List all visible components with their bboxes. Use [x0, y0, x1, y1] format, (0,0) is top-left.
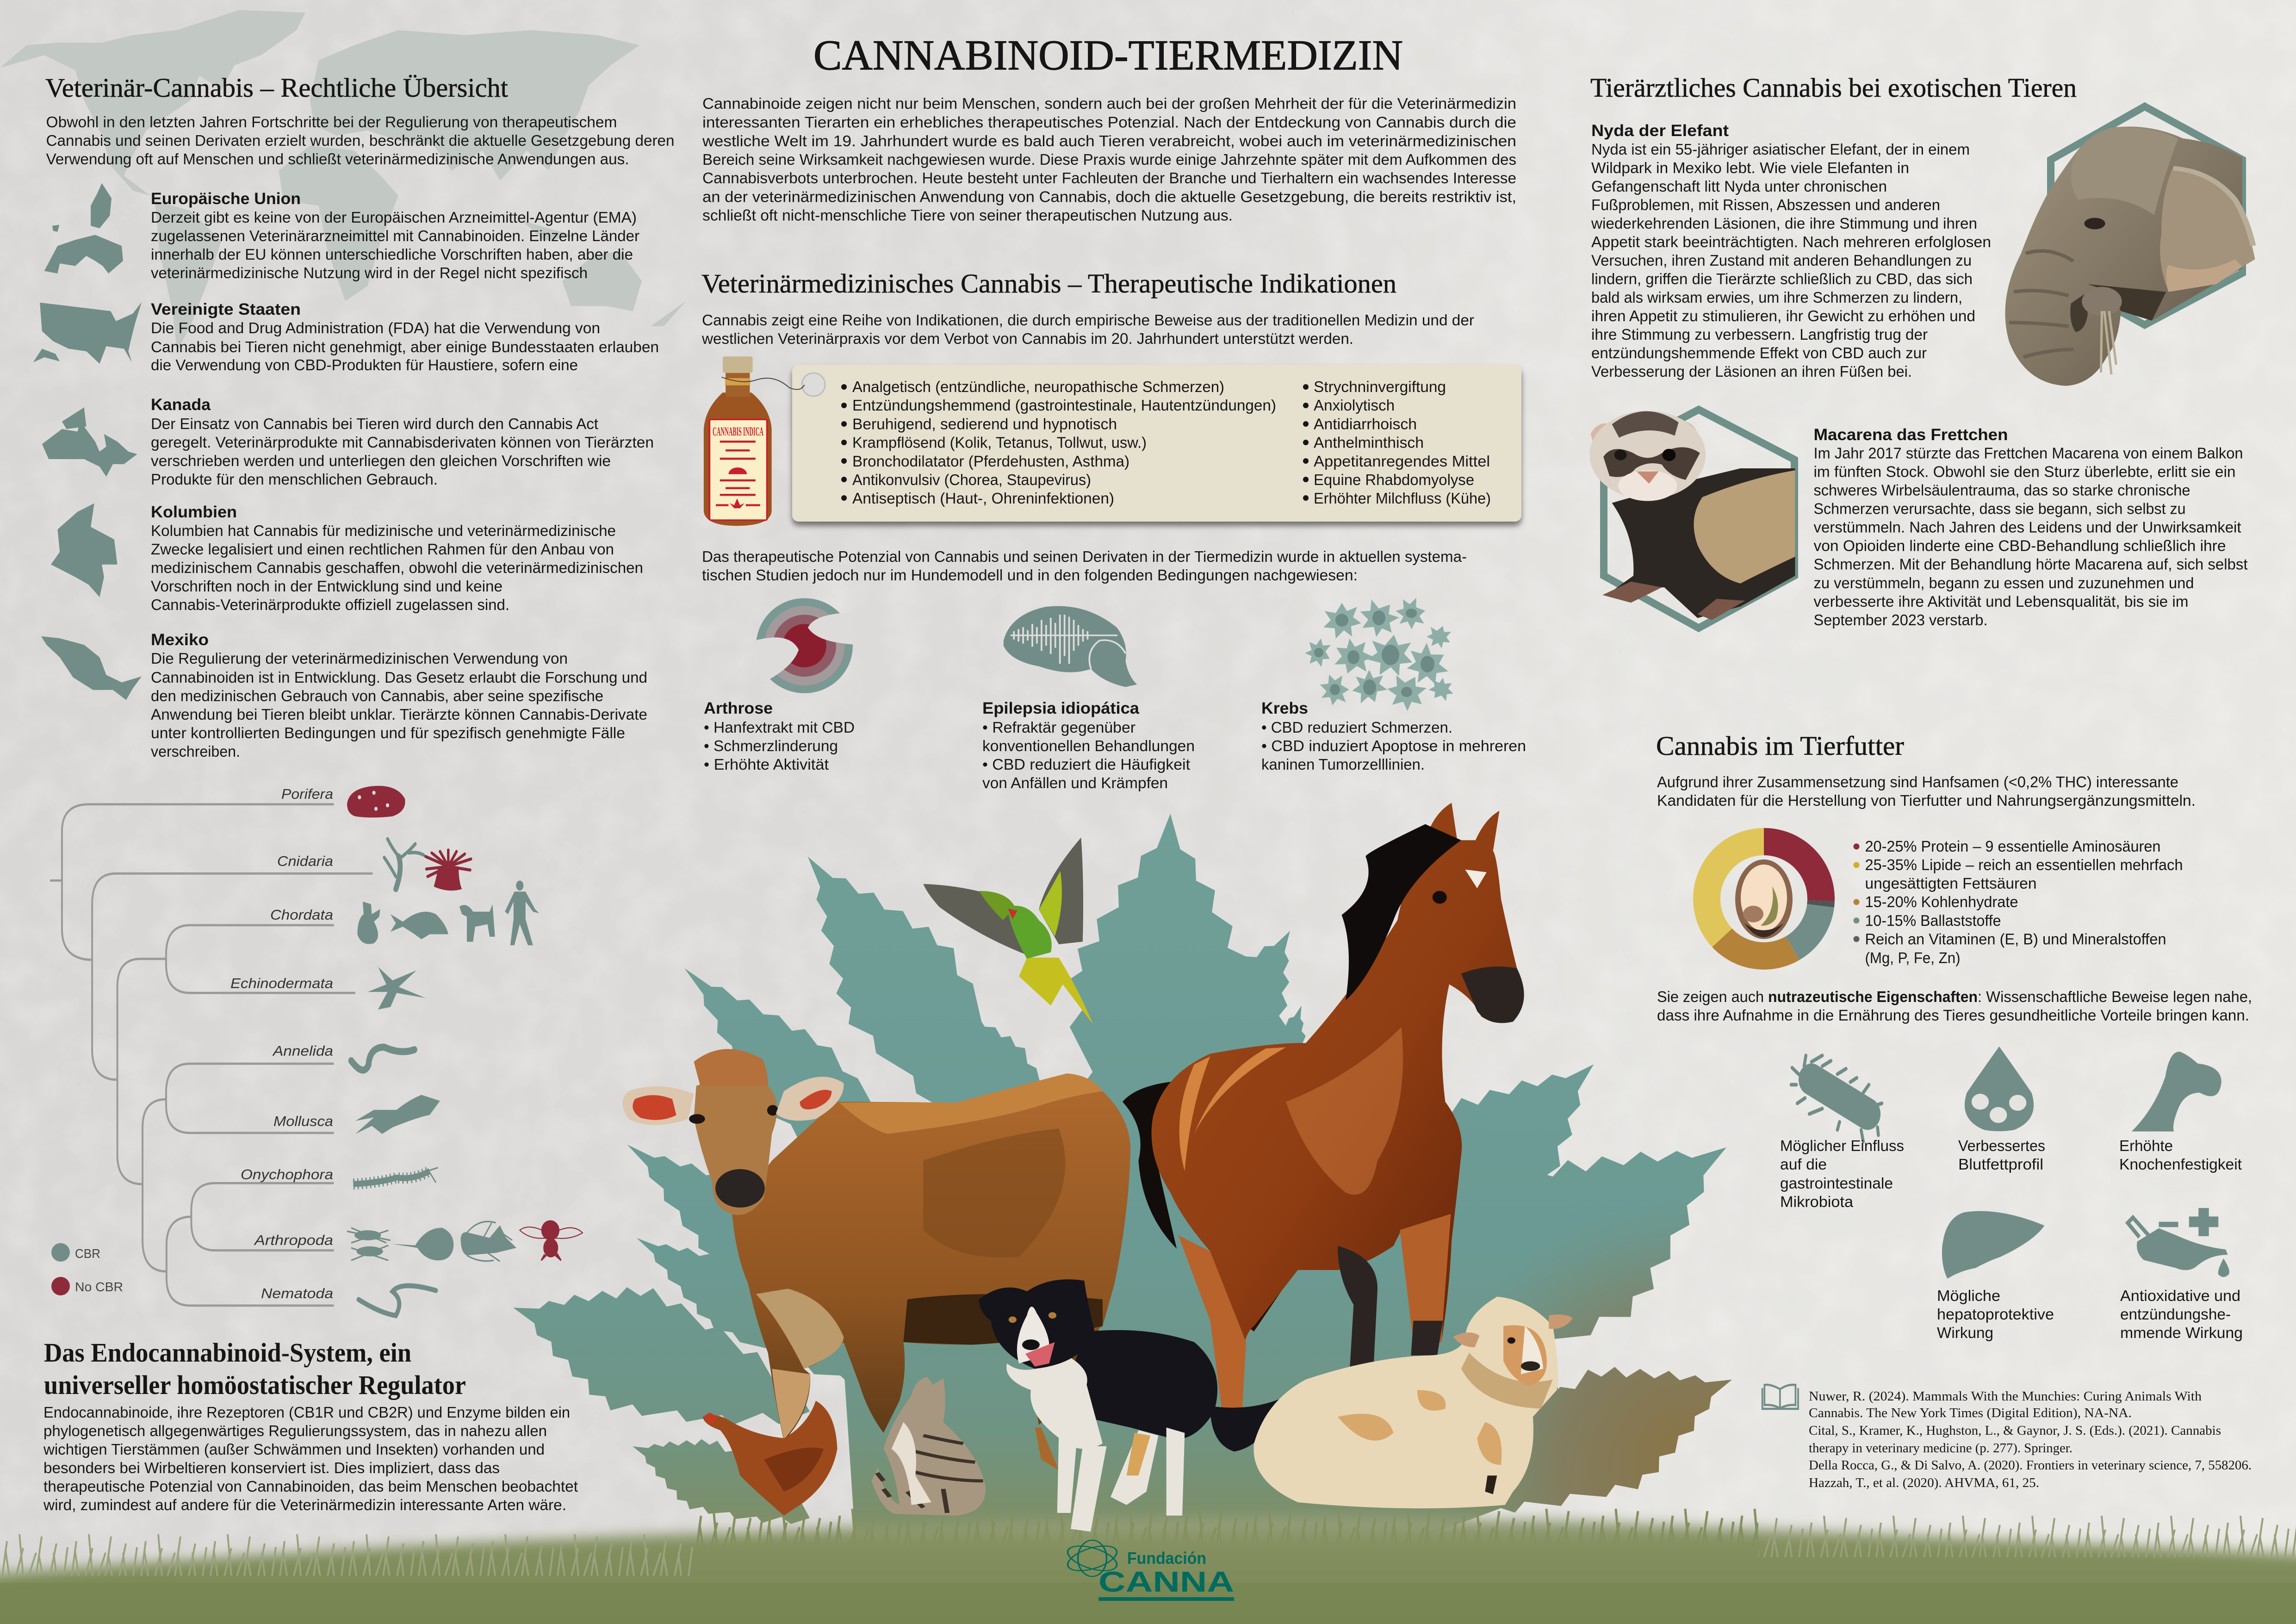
text block: Mexico: Mexiko	[151, 631, 209, 649]
text block: Macarena the ferret: verbesserte ihre Aktivität und Lebensqualität, bis sie im	[1814, 593, 2189, 610]
icon: Colombia map	[51, 503, 117, 597]
text block: cancer	[1261, 699, 1526, 773]
text block: canine evidence: tischen Studien jedoch nur im Hundemodell und in den folgenden Bedingungen nachgewiesen:	[702, 566, 1358, 584]
text block: indications intro: westlichen Veterinärpraxis vor dem Verbot von Cannabis im 20. Jahrhundert unterstützt werden.	[701, 330, 1353, 347]
text block: cancer: • CBD reduziert Schmerzen.	[1261, 719, 1452, 736]
text block: indications intro: Cannabis zeigt eine Reihe von Indikationen, die durch empirische Beweise aus der traditionellen Medizin und der	[702, 311, 1474, 329]
list: seed composition: 20-25% Protein – 9 essentielle Aminosäuren	[1865, 838, 2161, 855]
indications label card: Antidiarrhoisch	[1314, 416, 1417, 432]
text block: nutraceutical properties	[1657, 988, 2252, 1024]
heading	[44, 1338, 466, 1400]
icon: squid	[355, 1095, 440, 1134]
text block: lipid label: Verbessertes	[1958, 1137, 2045, 1154]
text block: antioxidant label: mmende Wirkung	[2120, 1324, 2243, 1341]
indications label card: Krampflösend (Kolik, Tetanus, Tollwut, usw.)	[852, 434, 1147, 451]
tree labels: Arthropoda	[254, 1232, 333, 1248]
indications label card: Strychninvergiftung	[1314, 378, 1446, 395]
text block: Endocannabinoide, ihre Rezeptoren (CB1R und CB2R) und Enzyme bilden ein	[43, 1404, 570, 1421]
list: seed composition: (Mg, P, Fe, Zn)	[1865, 949, 1960, 966]
panel: endocannabinoid system	[43, 1338, 578, 1513]
illustration: sheep	[1253, 1297, 1573, 1508]
text block: epilepsy	[982, 699, 1195, 791]
text block: Nyda the elephant: Versuchen, ihren Zustand mit anderen Behandlungen zu	[1591, 252, 1972, 269]
indications label card: Appetitanregendes Mittel	[1314, 453, 1490, 470]
text block: cancer: kaninen Tumorzelllinien.	[1261, 756, 1425, 773]
text block: legal intro	[46, 113, 675, 168]
text block: epilepsy: von Anfällen und Krämpfen	[982, 774, 1168, 791]
indications label card: Antikonvulsiv (Chorea, Staupevirus)	[852, 471, 1091, 488]
text block: introduction: Cannabisverbots unterbrochen. Heute besteht unter Fachleuten der Branche und Tierhaltern ein wachsendes Interesse	[702, 169, 1516, 187]
donut chart: hemp seed composition	[1693, 828, 1835, 970]
illustration: hen	[702, 1401, 837, 1516]
text block: references: Cannabis. The New York Times (Digital Edition), NA-NA.	[1809, 1406, 2132, 1420]
text block: references: Della Rocca, G., & Di Salvo, A. (2020). Frontiers in veterinary science, 7, 558206.	[1809, 1458, 2252, 1473]
heading: Cannabis im Tierfutter	[1656, 731, 1904, 761]
text block: Macarena the ferret: September 2023 verstarb.	[1814, 611, 1988, 628]
text block: antioxidant label: entzündungshe-	[2120, 1306, 2231, 1323]
list: seed composition: ungesättigten Fettsäuren	[1865, 875, 2037, 892]
tree labels: Onychophora	[241, 1166, 333, 1182]
text block: feed intro: Aufgrund ihrer Zusammensetzung sind Hanfsamen (<0,2% THC) interessante	[1657, 773, 2178, 790]
world map backdrop	[0, 10, 686, 351]
grass meadow	[0, 1500, 2296, 1624]
text block: Macarena the ferret: schweres Wirbelsäulentrauma, das so starke chronische	[1814, 481, 2191, 499]
icon: bone	[2132, 1052, 2222, 1132]
icon: EU map	[44, 183, 123, 274]
text block: Mexico: den medizinischen Gebrauch von Cannabis, aber seine spezifische	[151, 687, 603, 704]
text block: Canada: geregelt. Veterinärprodukte mit Cannabisderivaten können von Tierärzten	[151, 434, 654, 451]
text block: lipid label: Blutfettprofil	[1958, 1156, 2043, 1173]
text block: arthrosis: • Schmerzlinderung	[704, 737, 838, 754]
text block: United States: Cannabis bei Tieren nicht genehmigt, aber einige Bundesstaaten erlauben	[151, 338, 659, 355]
illustration: border collie	[979, 1279, 1282, 1531]
text block: Canada: verschrieben werden und unterliegen den gleichen Vorschriften wie	[151, 452, 611, 469]
text block: epilepsy: konventionellen Behandlungen	[982, 737, 1195, 754]
text block: Canada: Der Einsatz von Cannabis bei Tieren wird durch den Cannabis Act	[151, 415, 598, 432]
illustration: cat	[872, 1377, 986, 1516]
indications label card: Equine Rhabdomyolyse	[1314, 471, 1474, 488]
panel: phylogenetic tree	[50, 786, 583, 1316]
text block: Nyda the elephant: Nyda der Elefant	[1591, 122, 1729, 140]
list: seed composition: 25-35% Lipide – reich an essentiellen mehrfach	[1865, 856, 2183, 873]
text block: Canada: Kanada	[151, 396, 211, 414]
text block: Mexico: Anwendung bei Tieren bleibt unklar. Tierärzte können Cannabis-Derivate	[151, 706, 647, 723]
text block: Canada: Produkte für den menschlichen Gebrauch.	[151, 471, 438, 488]
legend: CBR	[75, 1246, 100, 1261]
text block: Mexico	[151, 631, 647, 760]
text block: Nyda the elephant: Appetit stark beeinträchtigten. Nach mehreren erfolglosen	[1591, 233, 1991, 250]
text block: Colombia	[151, 503, 643, 613]
icon: cnidaria organisms	[384, 839, 471, 890]
text block: introduction: schließt oft nicht-menschliche Tiere von seiner therapeutischen Nutzung aus.	[702, 206, 1233, 224]
list: seed composition	[1854, 838, 2183, 966]
heading: universeller homöostatischer Regulator	[44, 1370, 466, 1400]
icon: velvet worm	[353, 1168, 438, 1184]
tree labels: Mollusca	[273, 1113, 333, 1129]
text block: United States: die Verwendung von CBD-Produkten für Haustiere, sofern eine	[151, 356, 578, 373]
text block: Canada	[151, 396, 654, 488]
logo: Fundación CANNA	[1061, 1540, 1234, 1601]
text block: European Union: innerhalb der EU können unterschiedliche Vorschriften haben, aber die	[151, 246, 633, 263]
text block: bone label: Erhöhte	[2119, 1137, 2173, 1154]
icon: tumor cells	[1300, 593, 1458, 717]
text block: Nyda the elephant: ihren Appetit zu stimulieren, ihr Gewicht zu erhöhen und	[1591, 307, 1975, 324]
text block: epilepsy: Epilepsia idiopática	[982, 699, 1140, 717]
text block: phylogenetisch allgegenwärtiges Regulierungssystem, das in nahezu allen	[43, 1422, 547, 1439]
icon: starfish	[368, 967, 426, 1009]
text block: feed intro: Kandidaten für die Herstellung von Tierfutter und Nahrungsergänzungsmitteln.	[1657, 792, 2196, 809]
tree labels: Annelida	[272, 1043, 333, 1059]
text block: canine evidence	[702, 548, 1467, 584]
text block: Colombia: Kolumbien hat Cannabis für medizinische und veterinärmedizinische	[151, 522, 616, 539]
text block: microbiota label: gastrointestinale	[1780, 1175, 1893, 1192]
text block: epilepsy: • CBD reduziert die Häufigkeit	[982, 756, 1190, 773]
text block: nutraceutical properties: nutrazeutische Eigenschaften	[1768, 988, 1978, 1005]
text block: Macarena the ferret: Schmerzen verursachte, dass sie begann, sich selbst zu	[1814, 500, 2186, 517]
indications label card: Beruhigend, sedierend und hypnotisch	[852, 416, 1117, 432]
text block: introduction: interessanten Tierarten ein erhebliches therapeutisches Potenzial. Nach der Entdeckung von Cannabis durch die	[702, 114, 1516, 131]
indications label card: Entzündungshemmend (gastrointestinale, Hautentzündungen)	[852, 397, 1276, 414]
text block: Nyda the elephant: Fußproblemen, mit Rissen, Abszessen und anderen	[1591, 196, 1940, 213]
text block: bone label: Knochenfestigkeit	[2119, 1156, 2242, 1173]
text block: nutraceutical properties: Sie zeigen auch	[1657, 988, 1764, 1005]
indications label card: Bronchodilatator (Pferdehusten, Asthma)	[852, 453, 1129, 470]
icon: Mexico map	[41, 636, 142, 700]
text block: legal intro: Cannabis und seinen Derivaten erzielt wurden, beschränkt die aktuelle Gesetzgebung deren	[46, 132, 675, 149]
illustration: cow	[622, 1049, 1130, 1470]
icon: chordata organisms	[357, 881, 539, 945]
text block: arthrosis: • Hanfextrakt mit CBD	[704, 719, 855, 736]
legend: No CBR	[75, 1280, 123, 1294]
text block: introduction: Cannabinoide zeigen nicht nur beim Menschen, sondern auch bei der großen Mehrheit der für die Veterinärmedizin	[702, 95, 1516, 112]
text block: Mexico: verschreiben.	[151, 743, 240, 760]
text block: indications intro	[701, 311, 1474, 347]
text block: cancer: Krebs	[1261, 699, 1308, 717]
icon: Canada map	[42, 406, 137, 477]
text block: arthrosis: Arthrose	[704, 699, 773, 717]
panel: exotic animals	[1589, 73, 2255, 628]
text block: microbiota label: auf die	[1780, 1156, 1827, 1173]
text block: Nyda the elephant: ihre Stimmung zu verbessern. Langfristig trug der	[1591, 326, 1928, 343]
text block: Mexico: Die Regulierung der veterinärmedizinischen Verwendung von	[151, 650, 568, 667]
text block: microbiota label: Möglicher Einfluss	[1780, 1137, 1904, 1154]
list: seed composition: 10-15% Ballaststoffe	[1865, 912, 2001, 929]
text block: liver label: Wirkung	[1937, 1324, 1993, 1341]
icon: open book	[1762, 1385, 1798, 1409]
text block: introduction: westliche Welt im 19. Jahrhundert wurde es bald auch Tieren verabreicht, wobei auch im veterinärmedizinischen	[702, 132, 1516, 149]
text block: Macarena the ferret: Im Jahr 2017 stürzte das Frettchen Macarena von einem Balkon	[1814, 444, 2243, 462]
text block: United States	[151, 300, 659, 373]
text block: Macarena the ferret: von Opioiden linderte eine CBD-Behandlung schließlich ihre	[1814, 537, 2226, 554]
icon: USA map	[33, 302, 142, 364]
text block: wichtigen Tierstämmen (außer Schwämmen und Insekten) vorhanden und	[43, 1441, 545, 1458]
text block: antioxidant label: Antioxidative und	[2120, 1287, 2240, 1304]
panel: therapeutic indications	[701, 268, 1526, 791]
text block: Nyda the elephant: Gefangenschaft litt Nyda unter chronischen	[1591, 178, 1887, 195]
text block: microbiota label: Mikrobiota	[1780, 1193, 1854, 1210]
illustration: ferret in hexagon	[1589, 410, 1795, 628]
text block: references: Nuwer, R. (2024). Mammals With the Munchies: Curing Animals With	[1809, 1389, 2202, 1404]
text block: besonders bei Wirbeltieren konserviert ist. Dies impliziert, dass das	[43, 1459, 500, 1476]
text block: arthrosis: • Erhöhte Aktivität	[704, 756, 829, 773]
icon: sponge	[347, 786, 405, 818]
tree labels: Chordata	[270, 907, 333, 923]
tree labels: Echinodermata	[230, 975, 333, 991]
text block: Macarena the ferret: Macarena das Frettchen	[1814, 426, 2008, 444]
text block: liver label	[1937, 1287, 2054, 1341]
text block: Nyda the elephant: Nyda ist ein 55-jähriger asiatischer Elefant, der in einem	[1591, 141, 1970, 158]
heading: Das Endocannabinoid-System, ein	[44, 1338, 411, 1368]
text block: Macarena the ferret: zu verstümmeln, begann zu essen und zuzunehmen und	[1814, 574, 2194, 591]
icon: liver	[1942, 1211, 2044, 1279]
illustration: farm animals group	[622, 803, 1573, 1531]
text block: Nyda the elephant: lindern, griffen die Tierärzte schließlich zu CBD, das sich	[1591, 270, 1973, 287]
logo: Fundación CANNA: Fundación	[1127, 1549, 1206, 1568]
icon: blood drop	[1965, 1046, 2034, 1131]
icon: nematode	[359, 1286, 436, 1316]
text block: United States: Die Food and Drug Administration (FDA) hat die Verwendung von	[151, 319, 600, 336]
panel: cannabis in animal feed	[1656, 731, 2252, 1490]
indications label card: Antiseptisch (Haut-, Ohreninfektionen)	[852, 490, 1114, 507]
indications label card: Anthelminthisch	[1314, 434, 1424, 451]
icon: arthritic joint	[751, 598, 857, 693]
list: seed composition: Reich an Vitaminen (E, B) und Mineralstoffen	[1865, 930, 2166, 948]
text block: canine evidence: Das therapeutische Potenzial von Cannabis und seinen Derivaten in der Tiermedizin wurde in aktuellen systema-	[702, 548, 1467, 565]
text block: references: Hazzah, T., et al. (2020). AHVMA, 61, 25.	[1809, 1475, 2039, 1490]
text block: antioxidant label	[2120, 1287, 2243, 1341]
tree labels: Cnidaria	[277, 853, 333, 869]
legend	[51, 1243, 123, 1295]
illustration: parrot	[923, 838, 1093, 1024]
icon: cannabis indica bottle	[704, 356, 805, 526]
text block: Colombia: Vorschriften noch in der Entwicklung sind und keine	[151, 578, 503, 595]
icon: bacterium	[1791, 1056, 1882, 1142]
text block: cancer: • CBD induziert Apoptose in mehreren	[1261, 737, 1526, 754]
icon: cannabis indica bottle: CANNABIS INDICA	[713, 425, 763, 438]
text block: epilepsy: • Refraktär gegenüber	[982, 719, 1136, 736]
text block: Colombia: medizinischem Cannabis geschaffen, obwohl die veterinärmedizinischen	[151, 559, 643, 576]
text block: introduction: an der veterinärmedizinischen Anwendung von Cannabis, doch die aktuelle Gesetzgebung, die bereits restriktiv ist,	[702, 188, 1516, 205]
text block: Nyda the elephant: Verbesserung der Läsionen an ihren Füßen bei.	[1591, 363, 1912, 380]
text block: references	[1809, 1389, 2252, 1490]
illustration: cannabis leaf backdrop	[513, 814, 1732, 1536]
text block: Colombia: Zwecke legalisiert und einen rechtlichen Rahmen für den Anbau von	[151, 541, 614, 558]
text block: Nyda the elephant: wiederkehrenden Läsionen, die ihre Stimmung und ihren	[1591, 215, 1977, 232]
icon: oil can with cross	[2128, 1208, 2229, 1277]
text block: Nyda the elephant: entzündungshemmende Effekt von CBD auch zur	[1591, 344, 1927, 361]
list: seed composition: 15-20% Kohlenhydrate	[1865, 893, 2018, 910]
text block: European Union: Europäische Union	[151, 190, 301, 208]
illustration: horse	[1123, 803, 1524, 1412]
icon: annelid worm	[351, 1047, 415, 1070]
indications label card: Anxiolytisch	[1314, 397, 1395, 414]
text block: Colombia: Cannabis-Veterinärprodukte offiziell zugelassen sind.	[151, 596, 509, 613]
tree labels: Porifera	[281, 786, 333, 802]
icon: arthropods	[347, 1220, 583, 1262]
icon: brain with EEG waveform	[1004, 606, 1137, 687]
text block: Nyda the elephant: Wildpark in Mexiko lebt. Wie viele Elefanten in	[1591, 159, 1909, 176]
text block: therapeutische Potenzial von Cannabinoiden, das beim Menschen beobachtet	[43, 1478, 578, 1495]
text block: introduction: Bereich seine Wirksamkeit nachgewiesen wurde. Diese Praxis wurde einige Jahrzehnte später mit dem Aufkommen des	[702, 151, 1516, 168]
text block: liver label: Mögliche	[1937, 1287, 2000, 1304]
text block: references: therapy in veterinary medicine (p. 277). Springer.	[1809, 1441, 2073, 1456]
text block: Macarena the ferret: Schmerzen. Mit der Behandlung hörte Macarena auf, sich selbst	[1814, 555, 2248, 573]
text block: United States: Vereinigte Staaten	[151, 300, 301, 318]
text block: microbiota label	[1780, 1137, 1904, 1210]
text block: introduction	[702, 95, 1516, 224]
text block: Nyda the elephant: bald als wirksam erwies, um ihre Schmerzen zu lindern,	[1591, 289, 1962, 306]
text block: Macarena the ferret: im fünften Stock. Obwohl sie den Sturz überlebte, erlitt sie ein	[1814, 463, 2236, 480]
tree labels: Nematoda	[261, 1285, 333, 1301]
text block: European Union: veterinärmedizinische Nutzung wird in der Regel nicht spezifisch	[151, 264, 588, 281]
text block: legal intro: Obwohl in den letzten Jahren Fortschritte bei der Regulierung von therapeutischem	[46, 113, 617, 131]
text block	[43, 1404, 578, 1513]
text block: Mexico: unter kontrollierten Bedingungen und für spezifisch genehmigte Fälle	[151, 724, 625, 741]
text block: liver label: hepatoprotektive	[1937, 1306, 2054, 1323]
text block: European Union: zugelassenen Veterinärarzneimittel mit Cannabinoiden. Einzelne Länder	[151, 227, 639, 244]
title: CANNABINOID-TIERMEDIZIN	[813, 31, 1403, 79]
text block: references: Cital, S., Kramer, K., Hughston, L., & Gaynor, J. S. (Eds.). (2021). Cannabis	[1809, 1423, 2221, 1438]
text block: arthrosis	[704, 699, 855, 773]
indications label card	[792, 365, 1521, 522]
panel: veterinary cannabis legal overview	[33, 73, 675, 760]
indications label card: Analgetisch (entzündliche, neuropathische Schmerzen)	[852, 378, 1224, 395]
text block: nutraceutical properties: : Wissenschaftliche Beweise legen nahe,	[1978, 988, 2252, 1005]
text block: feed intro	[1657, 773, 2196, 809]
tree labels	[230, 786, 333, 1301]
text block: Macarena the ferret: verstümmeln. Nach Jahren des Leidens und der Unwirksamkeit	[1814, 518, 2241, 536]
heading: Tierärztliches Cannabis bei exotischen Tieren	[1590, 73, 2077, 103]
text block: Macarena the ferret	[1814, 426, 2248, 628]
text block: lipid label	[1958, 1137, 2045, 1173]
text block: Nyda the elephant	[1591, 122, 1991, 380]
illustration: elephant in hexagon	[2005, 106, 2255, 386]
text block: European Union	[151, 190, 639, 281]
text block: European Union: Derzeit gibt es keine von der Europäischen Arzneimittel-Agentur (EMA)	[151, 209, 637, 226]
tree branches	[50, 804, 372, 1306]
text block: bone label	[2119, 1137, 2242, 1173]
text block: nutraceutical properties: dass ihre Aufnahme in die Ernährung des Tieres gesundheitliche Vorteile bringen kann.	[1657, 1007, 2249, 1024]
text block: Colombia: Kolumbien	[151, 503, 237, 521]
indications label card: Erhöhter Milchfluss (Kühe)	[1314, 490, 1491, 507]
text block: legal intro: Verwendung oft auf Menschen und schließt veterinärmedizinische Anwendungen aus.	[46, 150, 629, 168]
text block: Mexico: Cannabinoiden ist in Entwicklung. Das Gesetz erlaubt die Forschung und	[151, 669, 647, 686]
heading: Veterinärmedizinisches Cannabis – Therapeutische Indikationen	[701, 268, 1396, 299]
heading: legal overview: Veterinär-Cannabis – Rechtliche Übersicht	[45, 73, 508, 103]
text block: wird, zumindest auf andere für die Veterinärmedizin interessante Arten wäre.	[43, 1496, 566, 1513]
logo: Fundación CANNA: CANNA	[1098, 1566, 1234, 1598]
